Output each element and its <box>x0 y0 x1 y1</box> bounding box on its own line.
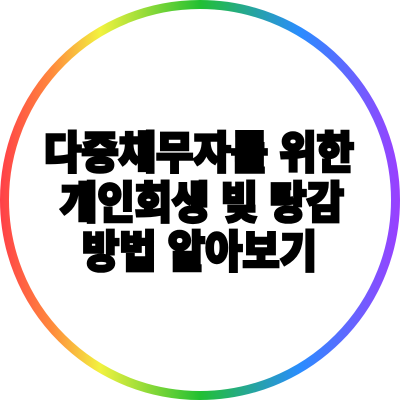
title line 2: 개인회생 빚 탕감 <box>60 179 344 228</box>
title line 1: 다중채무자를 위한 <box>44 129 354 178</box>
title line 3: 방법 알아보기 <box>82 228 317 277</box>
title <box>44 129 354 277</box>
